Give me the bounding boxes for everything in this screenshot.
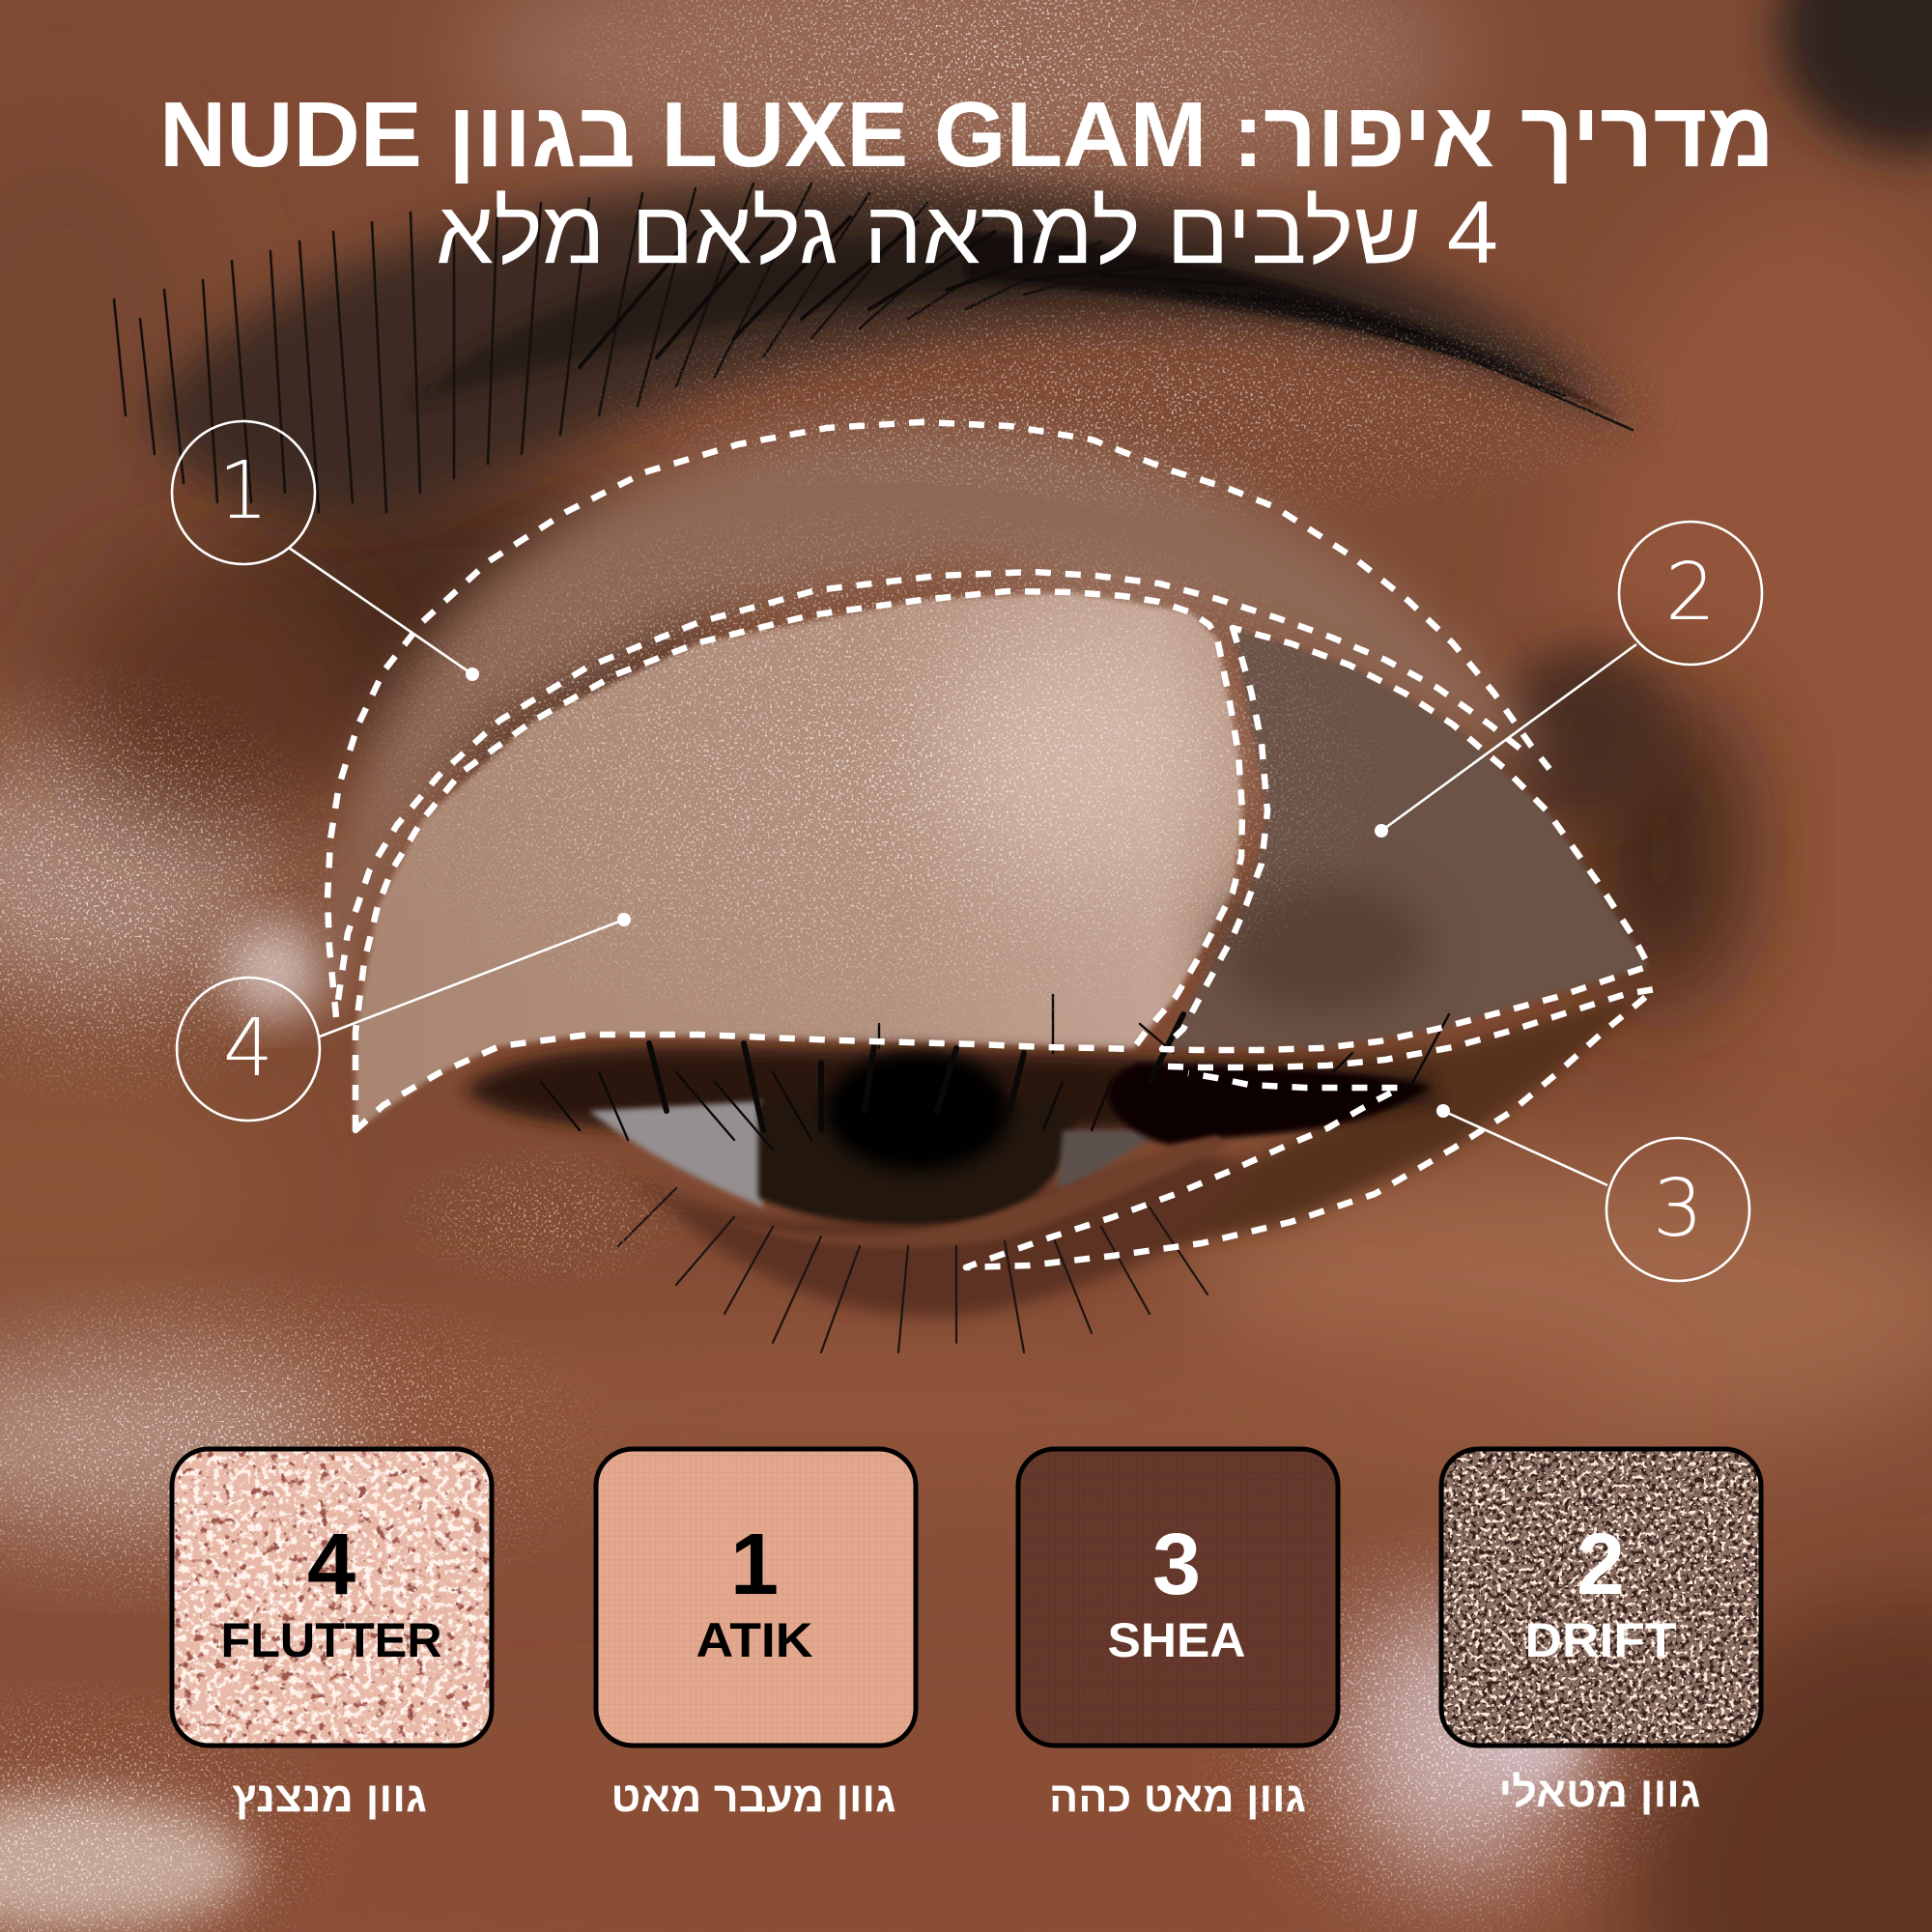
eyebrow mass	[145, 180, 1642, 518]
darker area on outer lid	[1217, 879, 1430, 1014]
title: מדריך איפור: LUXE GLAM בגוון NUDE	[159, 83, 1775, 186]
iris	[758, 1101, 1074, 1225]
swatch: Shea	[1018, 1449, 1338, 1746]
swatch: Flutter	[172, 1449, 492, 1746]
swatch: Drift: 2	[1577, 1517, 1625, 1613]
sclera	[589, 1101, 763, 1208]
shimmer glow on lid	[937, 628, 1227, 879]
eye lashes	[541, 995, 1449, 1352]
swatch: Flutter: 4	[307, 1517, 355, 1613]
subtitle: 4 שלבים למראה גלאם מלא	[436, 184, 1498, 282]
eye socket upper dark band	[464, 1047, 1439, 1134]
caption: Atik: גוון מעבר מאט	[611, 1774, 896, 1821]
caption: Shea: גוון מאט כהה	[1049, 1774, 1306, 1821]
lower lid rim	[715, 1135, 1225, 1248]
dashed zone 2: outer lid	[1162, 628, 1649, 1050]
lash bar	[1108, 1063, 1430, 1145]
marker 4	[177, 913, 631, 1121]
marker 1	[172, 421, 479, 681]
caption: Drift: גוון מטאלי	[1499, 1769, 1700, 1816]
eyebrow hairs	[114, 184, 1633, 512]
shape fill: metallic outer lid 2	[1162, 628, 1649, 1049]
marker 2: 2	[1665, 547, 1716, 639]
shape fill: brow-bone zone 1	[327, 426, 1549, 1014]
swatch: Atik	[596, 1449, 916, 1746]
highlights on skin	[0, 744, 1584, 1932]
overlay: annotations, text and swatches	[165, 101, 1768, 1820]
marker 1: 1	[218, 445, 269, 537]
pupil and shaded upper iris	[826, 1051, 1009, 1171]
swatch: Shea: 3	[1152, 1517, 1201, 1613]
lower outer wing	[966, 989, 1655, 1267]
swatch: Drift: DRIFT	[1524, 1613, 1677, 1667]
dashed zone 1: brow bone	[327, 422, 1549, 1017]
marker 2	[1375, 522, 1762, 838]
marker 3: 3	[1653, 1163, 1703, 1255]
swatch: Flutter: FLUTTER	[220, 1613, 442, 1667]
dashed zone: crease outer line	[338, 572, 1526, 1000]
under-eye lash shadow	[618, 1150, 1256, 1317]
swatch: Shea: SHEA	[1107, 1613, 1246, 1667]
shape fill: shimmer lid 4	[355, 592, 1242, 1130]
dashed zone 3: outer wing	[966, 989, 1655, 1267]
marker 4: 4	[223, 1003, 273, 1094]
marker 3	[1436, 1104, 1749, 1281]
caption: Flutter: גוון מנצנץ	[232, 1774, 427, 1821]
swatch: Drift	[1441, 1449, 1761, 1746]
sclera right	[1058, 1130, 1159, 1190]
swatch: Atik: 1	[730, 1517, 779, 1613]
shadow below brow	[68, 473, 1748, 1014]
dashed zone 4: shimmer lid	[355, 591, 1242, 1130]
swatch: Atik: ATIK	[696, 1613, 813, 1667]
